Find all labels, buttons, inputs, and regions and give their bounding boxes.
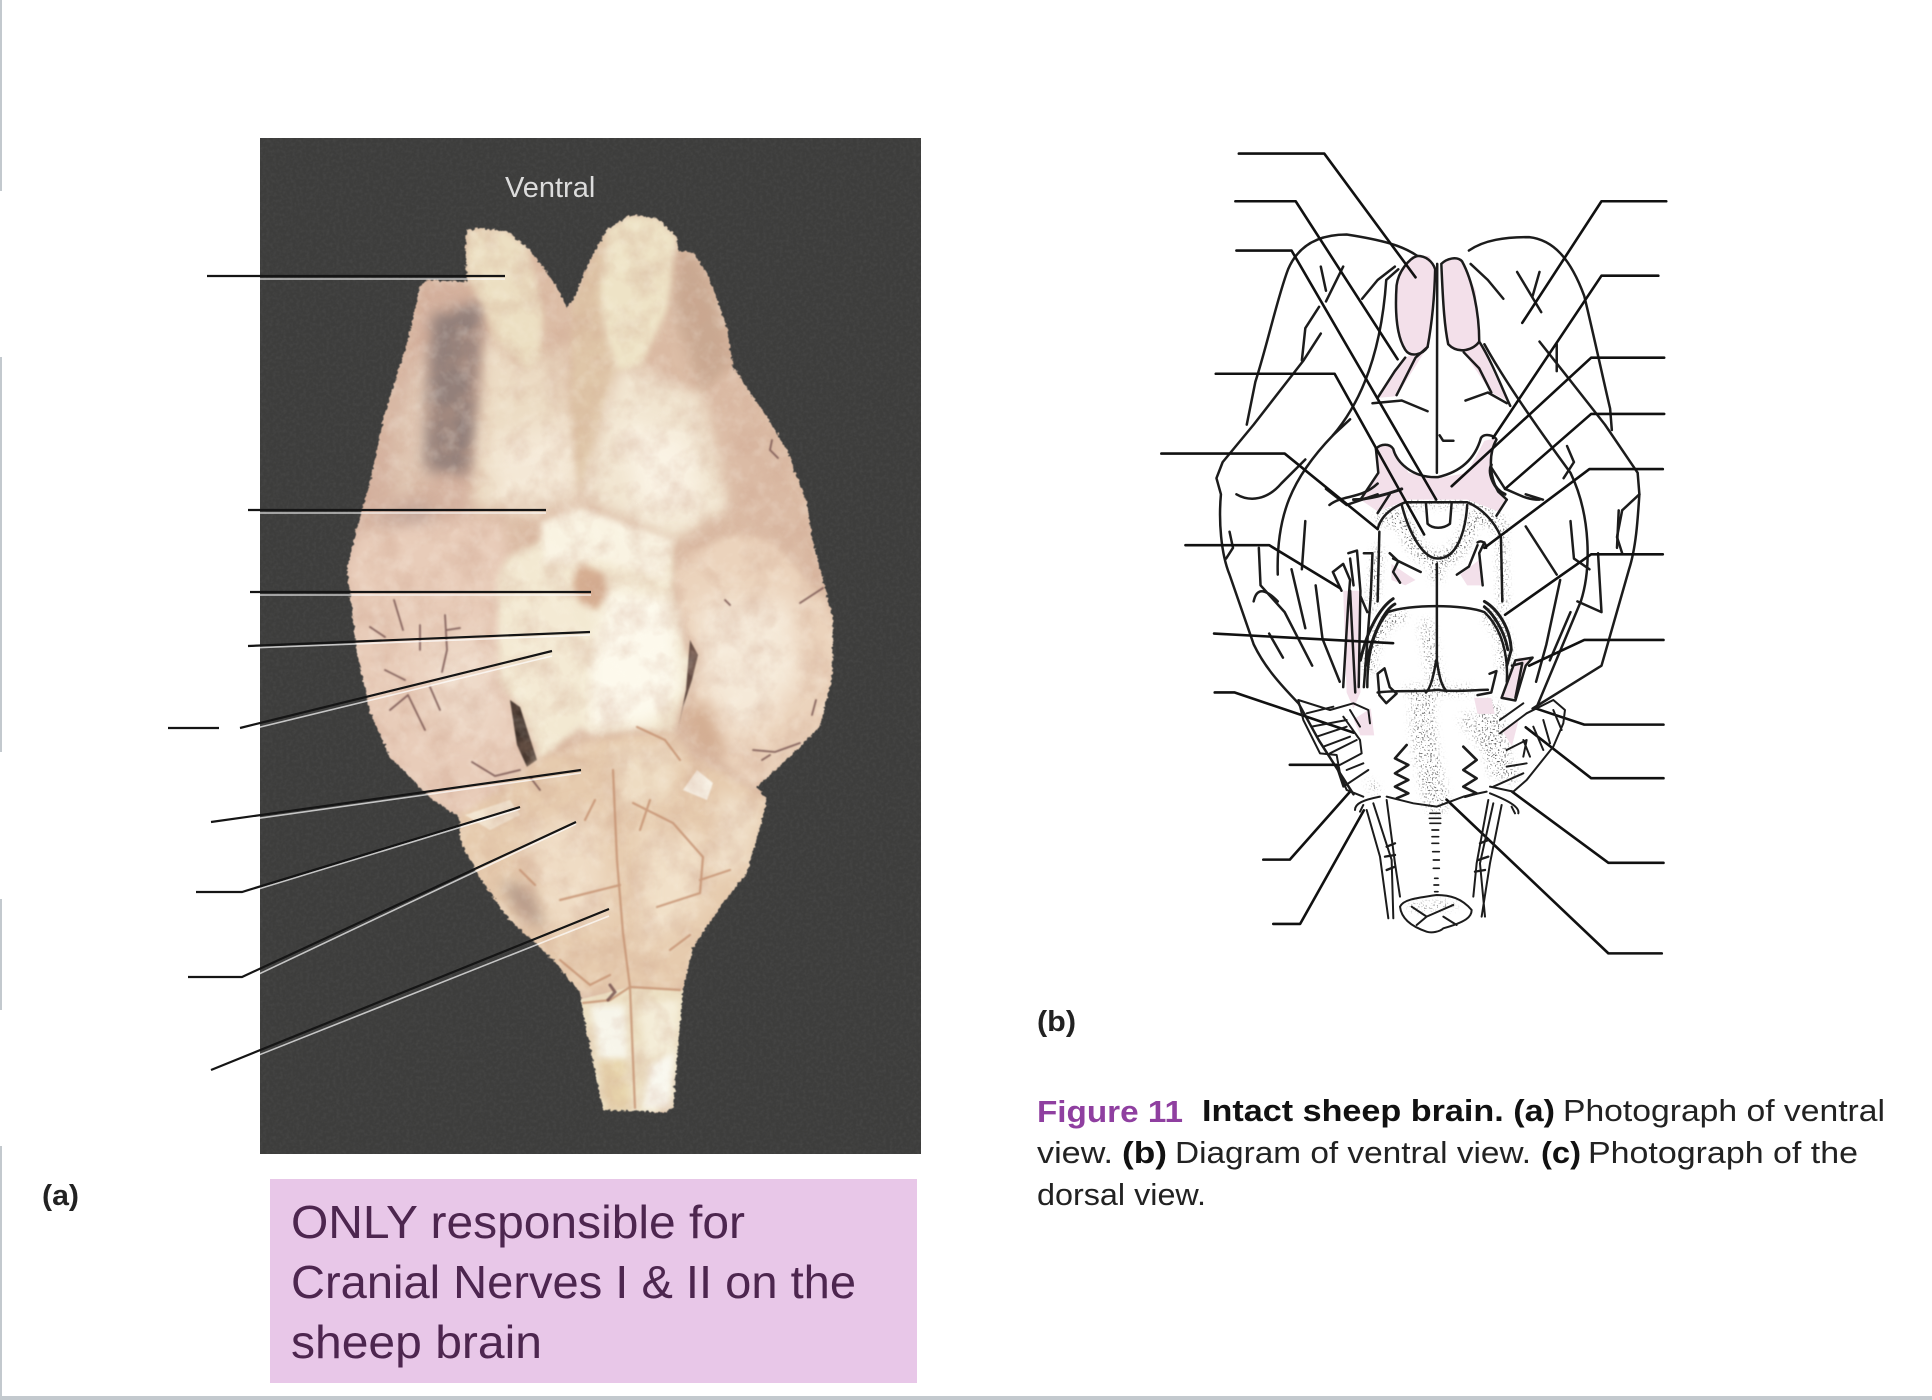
callout: responsibility note	[270, 1179, 917, 1383]
optic chiasm and nerves	[1376, 435, 1507, 500]
label (b): (b)	[1037, 1006, 1076, 1038]
photo label: Ventral: Ventral	[505, 172, 595, 204]
pons, cerebellum and medulla	[455, 733, 770, 993]
label (a): (a)	[42, 1180, 79, 1212]
grey sulcus patch	[425, 300, 482, 475]
pituitary stalk and tuber	[1426, 502, 1452, 528]
figure caption: Photograph of ventral	[1563, 1093, 1885, 1128]
left cerebellum folia	[1298, 700, 1370, 797]
right temporal lobe	[673, 533, 840, 790]
dark fissures	[510, 700, 537, 767]
cranial nerve roots, left	[1333, 551, 1372, 692]
photo dark background	[260, 138, 921, 1154]
figure caption: (c)	[1541, 1135, 1581, 1170]
figure caption: Intact sheep brain. (a)	[1202, 1093, 1555, 1128]
brainstem	[497, 527, 697, 760]
callout: responsibility note: Cranial Nerves I & II on the	[291, 1256, 856, 1308]
tuber pink depression	[572, 563, 607, 610]
left olfactory area	[473, 337, 580, 512]
cerebrum outlines	[1247, 234, 1417, 425]
hindbrain detail: cerebellum, medulla, spinal cord	[1298, 700, 1565, 932]
figure caption: Figure 11	[1037, 1094, 1183, 1129]
photo leader lines	[168, 276, 609, 1074]
right hemisphere strips	[572, 257, 607, 482]
spinal cord	[578, 987, 685, 1114]
left temporal lobe	[347, 515, 526, 814]
figure caption	[1037, 1093, 1885, 1212]
panel (a): ventral photograph of sheep brain	[168, 138, 921, 1154]
figure caption: Photograph of the	[1588, 1135, 1858, 1170]
spinal cord roots and edges	[1367, 800, 1400, 918]
brain specimen	[330, 200, 850, 1130]
right centre cream area	[580, 367, 730, 540]
figure caption: (b)	[1122, 1135, 1167, 1170]
olfactory bulbs and tracts	[1396, 256, 1435, 354]
surface vessels	[520, 727, 730, 1108]
white tissue patches	[683, 770, 713, 800]
left frontal lobe	[362, 287, 466, 518]
panel (b): line diagram of ventral brain	[1161, 154, 1666, 953]
pyramids zigzag rootlets	[1395, 745, 1408, 798]
cord cross-section	[1400, 895, 1472, 932]
figure caption: dorsal view.	[1037, 1177, 1206, 1212]
left olfactory bulb	[465, 228, 543, 370]
pons	[1367, 606, 1507, 687]
pink shaded olfactory and optic structures	[1343, 256, 1529, 746]
texture overlays	[350, 225, 832, 1112]
diagram stipple shading	[1360, 500, 1524, 915]
callout: responsibility note: sheep brain	[291, 1316, 542, 1368]
figure caption: Diagram of ventral view.	[1175, 1135, 1531, 1170]
medulla lower edge	[1387, 792, 1487, 807]
callout: responsibility note: ONLY responsible for	[291, 1196, 745, 1248]
right cerebellum folia	[1490, 700, 1565, 792]
leader lines	[1161, 154, 1666, 953]
trigeminal stumps	[1378, 668, 1496, 703]
figure caption: view.	[1037, 1135, 1113, 1170]
central fissure	[1429, 813, 1441, 892]
right olfactory bulb	[600, 215, 677, 370]
